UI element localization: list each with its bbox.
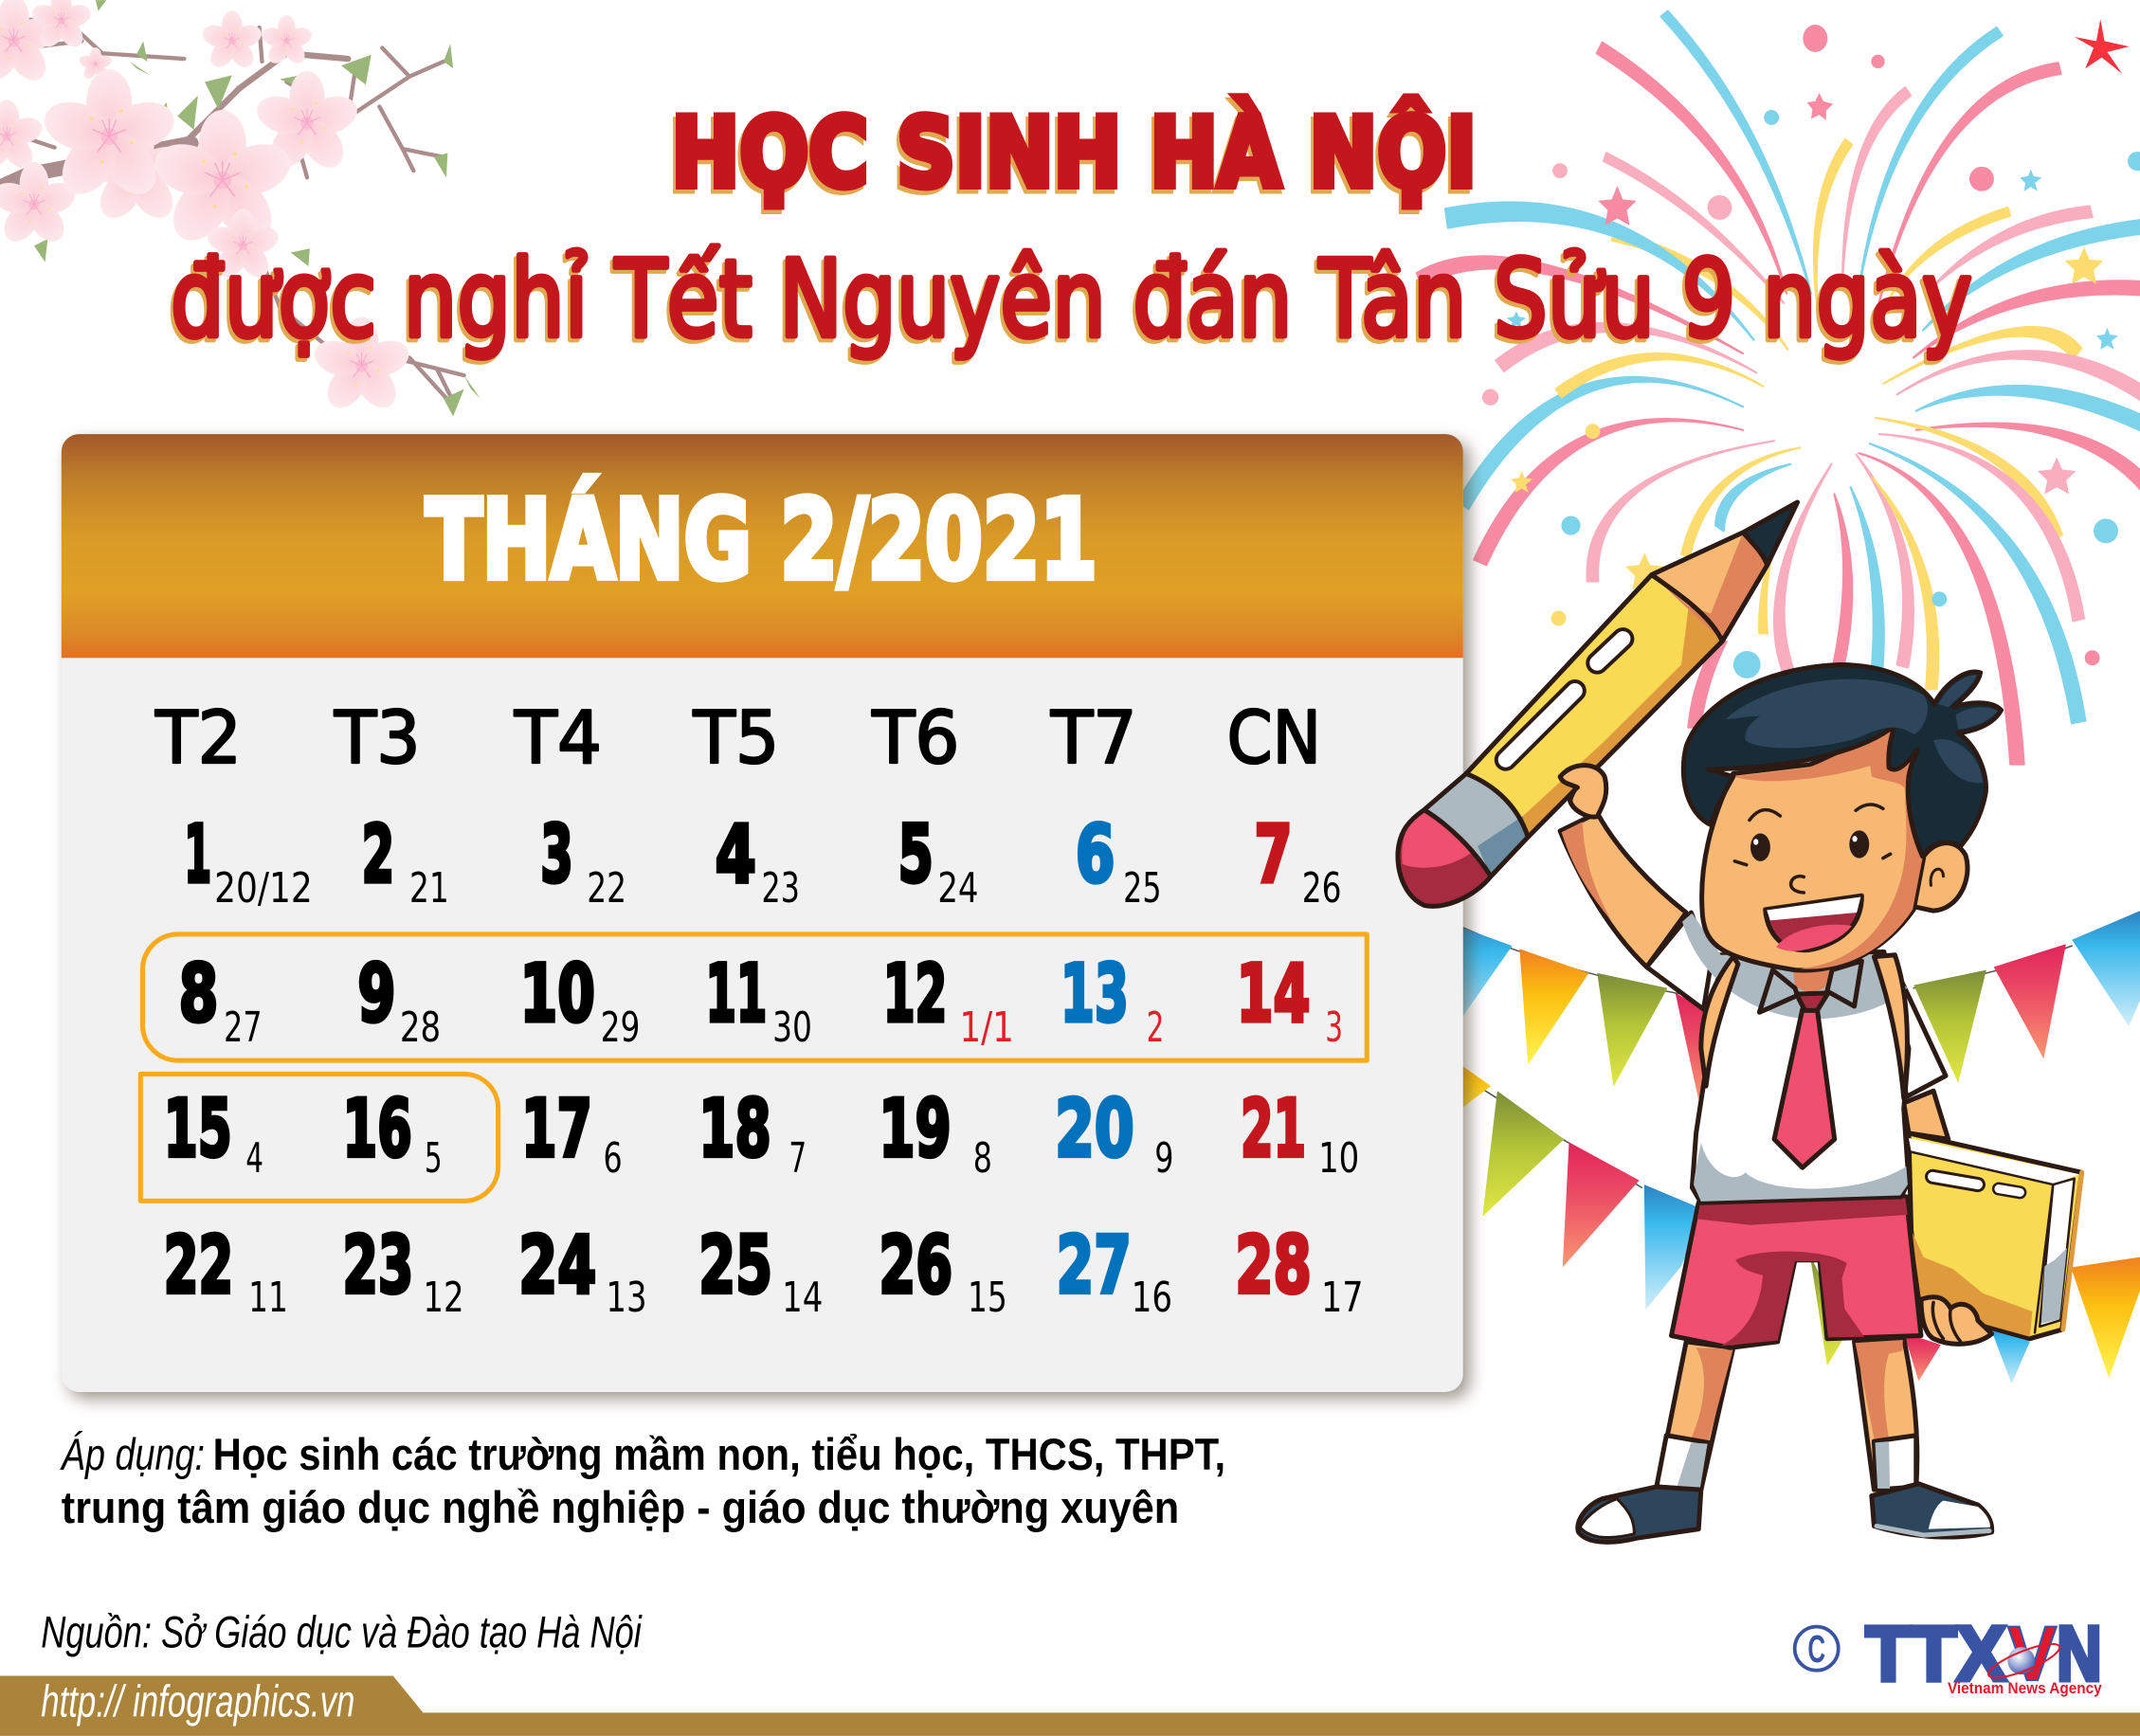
fireworks <box>1417 11 2140 765</box>
calendar days: 25 <box>698 1219 772 1311</box>
weekday headers <box>154 696 1321 780</box>
calendar days: 18 <box>698 1082 771 1175</box>
calendar days: 5 <box>425 1135 443 1183</box>
calendar days: 10 <box>520 947 595 1040</box>
hand on book <box>1921 1297 1992 1344</box>
calendar days: 30 <box>772 1004 812 1052</box>
calendar days: 24 <box>937 865 979 913</box>
calendar days: 12 <box>883 947 947 1040</box>
calendar days: 13 <box>606 1275 647 1322</box>
weekday headers: T6 <box>871 696 959 780</box>
calendar days: 21 <box>409 865 449 913</box>
neck <box>1792 964 1832 993</box>
copyright symbol <box>1795 1627 1839 1671</box>
holiday highlight: week 3 <box>140 1074 499 1201</box>
ear <box>1913 843 1968 911</box>
calendar days: 11 <box>706 947 767 1040</box>
weekday headers: T4 <box>514 696 602 780</box>
calendar days: 29 <box>601 1004 640 1052</box>
calendar days: 7 <box>789 1135 807 1183</box>
calendar days: 26 <box>1302 865 1342 913</box>
calendar days: 15 <box>968 1275 1007 1322</box>
socks <box>1657 1436 1916 1490</box>
copyright symbol: C <box>1807 1627 1825 1671</box>
hair <box>1683 665 2002 857</box>
pencil <box>1398 502 1798 906</box>
calendar days: 14 <box>1237 947 1310 1040</box>
applicability note: Học sinh các trường mầm non, tiểu học, THCS, THPT, <box>213 1430 1225 1480</box>
calendar panel <box>62 434 1463 1392</box>
calendar days: 1 <box>184 807 211 900</box>
illustration: boy with pencil and book <box>1398 502 2082 1542</box>
applicability note <box>60 1430 1225 1533</box>
necktie <box>1774 993 1835 1167</box>
right arm <box>1904 1091 1949 1139</box>
footer bar <box>0 1676 2140 1736</box>
calendar days: 27 <box>1057 1219 1132 1311</box>
weekday headers: T2 <box>154 696 242 780</box>
calendar days: 12 <box>423 1275 464 1322</box>
shirt <box>1646 913 1946 1203</box>
calendar days: 22 <box>587 865 626 913</box>
calendar days: 20/12 <box>214 865 313 913</box>
weekday headers: T3 <box>334 696 421 780</box>
calendar days: 20 <box>1055 1082 1134 1175</box>
calendar days: 9 <box>357 947 396 1040</box>
weekday headers: CN <box>1227 696 1321 780</box>
hand on pencil <box>1560 766 1606 817</box>
calendar days: 9 <box>1154 1135 1173 1183</box>
shoes <box>1578 1484 1992 1542</box>
collar <box>1759 961 1861 1012</box>
calendar days: 10 <box>1318 1135 1359 1183</box>
right leg <box>1855 1339 1917 1490</box>
calendar days: 17 <box>521 1082 592 1175</box>
calendar month heading: THÁNG 2/2021 <box>426 476 1097 604</box>
calendar days: 17 <box>1321 1275 1364 1322</box>
calendar days: 6 <box>604 1135 623 1183</box>
bunting flags <box>1429 911 2140 1384</box>
calendar days: 8 <box>179 947 218 1040</box>
calendar days: 8 <box>973 1135 992 1183</box>
calendar days <box>164 807 1364 1322</box>
calendar days: 23 <box>762 865 800 913</box>
calendar days: 4 <box>245 1135 263 1183</box>
book <box>1909 1133 2082 1339</box>
weekday headers: T7 <box>1050 696 1137 780</box>
mouth <box>1766 895 1861 951</box>
holiday highlight: week 2 <box>142 934 1367 1060</box>
footer url: http:// infographics.vn <box>41 1677 354 1727</box>
source: Nguồn: Sở Giáo dục và Đào tạo Hà Nội <box>41 1607 643 1657</box>
calendar days: 3 <box>1325 1004 1343 1052</box>
calendar days: 6 <box>1076 807 1115 900</box>
calendar days: 1/1 <box>959 1004 1014 1052</box>
calendar days: 2 <box>362 807 394 900</box>
calendar days: 16 <box>342 1082 412 1175</box>
calendar header band <box>62 434 1463 658</box>
calendar days: 28 <box>400 1004 441 1052</box>
title line 1: HỌC SINH HÀ NỘI <box>672 96 1477 208</box>
backpack straps <box>1701 955 1907 1098</box>
cherry blossom branch <box>0 0 481 416</box>
TTXVN logo: N <box>2057 1611 2102 1697</box>
calendar days: 4 <box>716 807 756 900</box>
calendar days: 28 <box>1235 1219 1312 1311</box>
calendar days: 19 <box>879 1082 952 1175</box>
calendar days: 15 <box>164 1082 232 1175</box>
calendar days: 22 <box>164 1219 233 1311</box>
calendar days: 5 <box>898 807 934 900</box>
eyes and brows <box>1734 805 1891 893</box>
applicability note: Áp dụng: <box>60 1430 205 1480</box>
arm raised <box>1560 813 1686 967</box>
face <box>1702 729 1924 970</box>
calendar days: 21 <box>1241 1082 1306 1175</box>
TTXVN logo: TTX <box>1866 1611 2006 1697</box>
weekday headers: T5 <box>693 696 779 780</box>
calendar days: 3 <box>540 807 573 900</box>
calendar days: 7 <box>1254 807 1293 900</box>
calendar card body <box>62 434 1463 1392</box>
TTXVN logo <box>1866 1611 2102 1697</box>
calendar days: 23 <box>342 1219 413 1311</box>
calendar days: 14 <box>782 1275 823 1322</box>
calendar days: 16 <box>1132 1275 1172 1322</box>
calendar days: 25 <box>1123 865 1161 913</box>
calendar days: 27 <box>224 1004 262 1052</box>
TTXVN logo: V <box>2007 1611 2057 1697</box>
left leg <box>1657 1342 1733 1490</box>
calendar days: 26 <box>879 1219 952 1311</box>
calendar days: 13 <box>1061 947 1129 1040</box>
shorts <box>1672 1197 1921 1347</box>
applicability note: trung tâm giáo dục nghề nghiệp - giáo dục thường xuyên <box>62 1483 1179 1533</box>
calendar days: 2 <box>1147 1004 1164 1052</box>
calendar days: 11 <box>248 1275 288 1322</box>
title line 1: HỌC SINH HÀ NỘI <box>669 99 1474 212</box>
calendar days: 24 <box>518 1219 596 1311</box>
TTXVN logo: Vietnam News Agency <box>1948 1679 2102 1697</box>
